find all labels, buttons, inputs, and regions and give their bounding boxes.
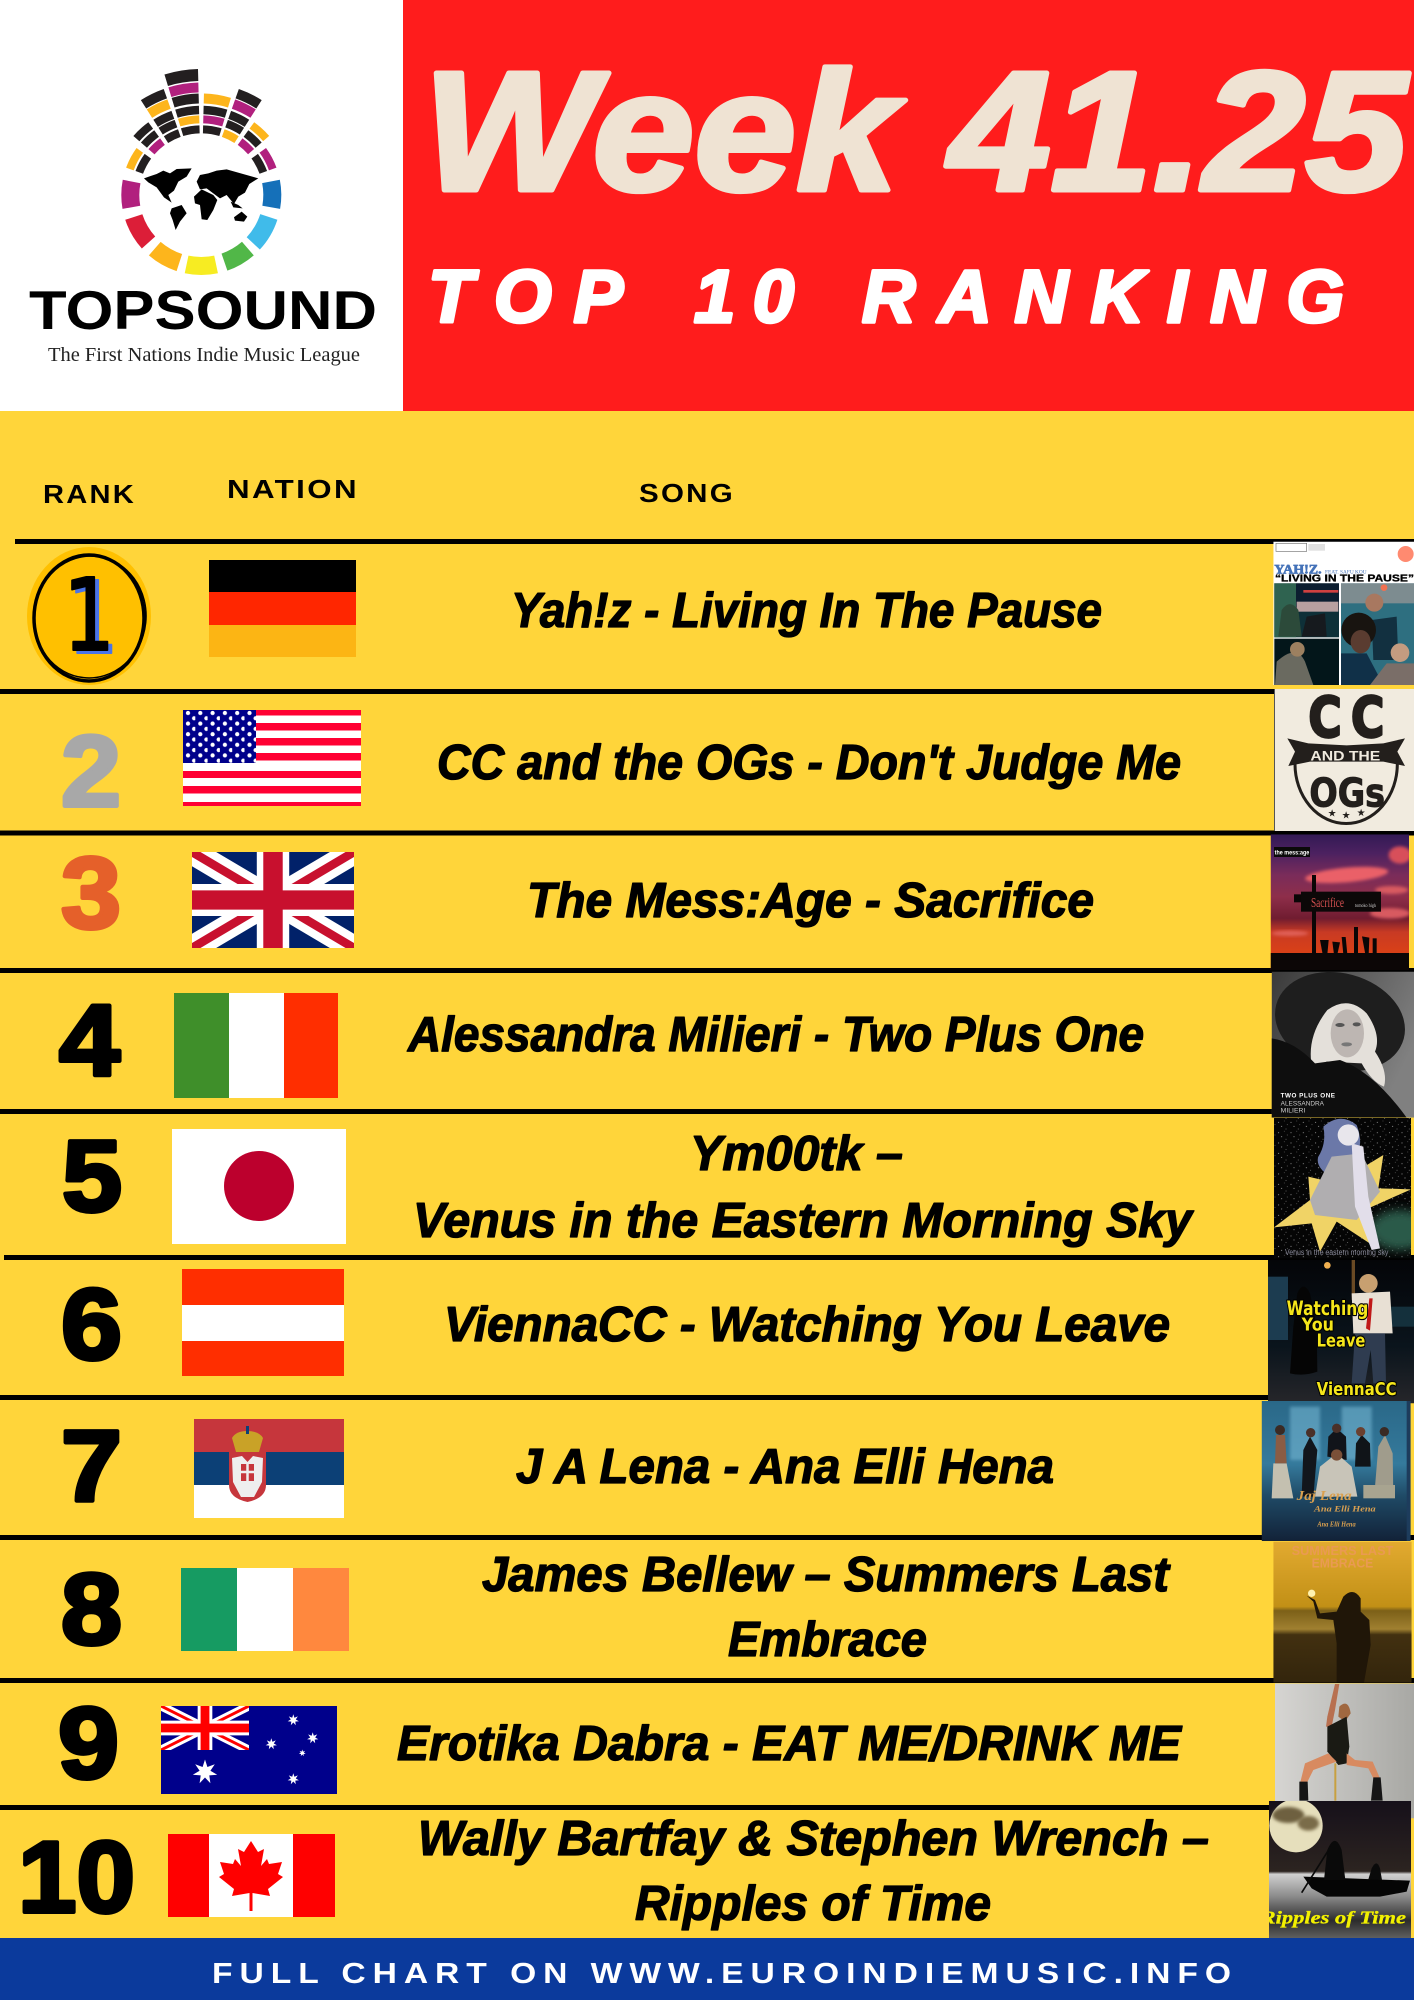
rank 1 badge: 1 — [67, 560, 119, 677]
song 5: Venus in the Eastern Morning Sky — [413, 1194, 1195, 1248]
column headings — [43, 474, 735, 509]
column headings: RANK — [43, 479, 136, 509]
cover 6: ViennaCC: Leave — [1317, 1331, 1365, 1352]
cover 1: Yah!z: “LIVING IN THE PAUSE” — [1275, 574, 1414, 585]
rank 4: 4 — [59, 985, 120, 1097]
panel: header — [403, 0, 1414, 411]
cover 7: J A Lena: Ana Elli Hena — [1316, 1520, 1356, 1529]
cover 2: CC and the OGs: OGs — [1309, 771, 1385, 817]
cover 4: Alessandra Milieri: ALESSANDRA — [1281, 1101, 1325, 1108]
flag: Canada — [168, 1834, 335, 1917]
title: week: Week 41.25 — [423, 37, 1410, 227]
cover 7: J A Lena — [1262, 1401, 1411, 1541]
rank 7: 7 — [61, 1411, 122, 1523]
icon: world map — [144, 168, 258, 230]
cover 8: James Bellew — [1273, 1542, 1412, 1682]
flag: USA — [183, 710, 361, 806]
rank 10: 10 — [18, 1822, 135, 1934]
song 7: J A Lena - Ana Elli Hena — [516, 1440, 1054, 1494]
subtitle: top 10 ranking — [428, 255, 1344, 338]
cover 3: The Mess:Age: the mess:age — [1275, 849, 1310, 856]
logo wordmark: TOPSOUND — [29, 279, 377, 341]
song 10: Ripples of Time — [635, 1877, 991, 1931]
subtitle: top 10 ranking: TOP — [428, 255, 624, 338]
rank 2: 2 — [61, 716, 121, 828]
flag: Serbia — [194, 1419, 344, 1518]
rank 5: 5 — [62, 1121, 122, 1233]
song 6: ViennaCC - Watching You Leave — [444, 1298, 1170, 1352]
flag: UK — [192, 852, 354, 948]
song 4: Alessandra Milieri - Two Plus One — [407, 1008, 1144, 1062]
cover 2: CC and the OGs: ★ — [1328, 809, 1337, 820]
cover 1: Yah!z — [1273, 542, 1414, 685]
footer — [0, 1938, 1414, 2000]
footer text: FULL CHART ON WWW.EUROINDIEMUSIC.INFO — [212, 1958, 1238, 1990]
cover 6: ViennaCC: You — [1301, 1315, 1334, 1336]
cover 7: J A Lena: Ana Elli Hena — [1313, 1504, 1376, 1514]
cover 1: Yah!z: FEAT. SAFU KOU — [1325, 570, 1367, 575]
cover 8: James Bellew: EMBRACE — [1312, 1556, 1373, 1570]
cover 3: The Mess:Age: tomoko high — [1355, 904, 1377, 909]
cover 5: Ym00tk — [1274, 1118, 1411, 1258]
song 5: Ym00tk – — [690, 1127, 903, 1181]
cover 7: J A Lena: Jaj Lena — [1296, 1489, 1352, 1504]
cover 6: ViennaCC: Watching — [1287, 1297, 1368, 1320]
song 8: Embrace — [728, 1613, 927, 1667]
song 8 — [482, 1548, 1171, 1667]
logo tagline: The First Nations Indie Music League — [48, 344, 360, 366]
song 3: The Mess:Age - Sacrifice — [527, 874, 1094, 928]
cover 2: CC and the OGs: C — [1351, 686, 1384, 750]
cover 8: James Bellew: SUMMERS LAST — [1292, 1544, 1394, 1558]
rank 8: 8 — [61, 1554, 122, 1666]
cover 6: ViennaCC — [1268, 1260, 1414, 1404]
cover 2: CC and the OGs: ★ — [1342, 811, 1351, 822]
column headings: SONG — [639, 478, 735, 508]
flag: Ireland — [181, 1568, 349, 1651]
rank 1 badge — [27, 547, 152, 685]
cover 9: Erotika Dabra — [1275, 1683, 1414, 1818]
rank 1 badge: 1 — [63, 557, 115, 674]
subtitle: top 10 ranking: RANKING — [862, 255, 1344, 338]
cover 3: The Mess:Age: Sacrifice — [1311, 895, 1344, 910]
flag: Japan — [172, 1129, 346, 1244]
panel: logo — [0, 0, 403, 411]
cover 4: Alessandra Milieri: TWO PLUS ONE — [1281, 1092, 1335, 1099]
flag: Australia — [161, 1706, 337, 1794]
rank 9: 9 — [58, 1688, 119, 1800]
cover 2: CC and the OGs: AND THE — [1310, 748, 1380, 764]
song 1: Yah!z - Living In The Pause — [511, 584, 1102, 638]
flag: Germany — [209, 560, 356, 657]
cover 3: The Mess:Age — [1270, 834, 1409, 970]
cover 10: Wally Bartfay — [1259, 1801, 1411, 1938]
rank 6: 6 — [61, 1269, 122, 1381]
flag: Italy — [174, 993, 338, 1098]
cover 4: Alessandra Milieri — [1272, 972, 1414, 1118]
cover 10: Wally Bartfay: Ripples of Time — [1259, 1907, 1406, 1927]
song 8: James Bellew – Summers Last — [482, 1548, 1171, 1602]
cover 6: ViennaCC: ViennaCC — [1317, 1380, 1397, 1400]
cover 2: CC and the OGs: C — [1308, 686, 1342, 750]
cover 2: CC and the OGs: ★ — [1357, 808, 1366, 819]
cover 1: Yah!z: YAH!Z. — [1274, 562, 1322, 576]
song 5 — [413, 1127, 1195, 1248]
logo emblem — [51, 45, 351, 345]
cover 2: CC and the OGs — [1274, 686, 1414, 831]
song 10 — [418, 1812, 1209, 1931]
cover 4: Alessandra Milieri: MILIERI — [1281, 1107, 1306, 1114]
column headings: NATION — [227, 474, 359, 504]
subtitle: top 10 ranking: 10 — [694, 255, 794, 338]
song 10: Wally Bartfay & Stephen Wrench – — [418, 1812, 1209, 1866]
flag: Austria — [182, 1269, 344, 1376]
song 2: CC and the OGs - Don't Judge Me — [437, 736, 1181, 790]
song 9: Erotika Dabra - EAT ME/DRINK ME — [397, 1717, 1182, 1771]
cover 5: Ym00tk: Venus in the eastern morning sky — [1285, 1248, 1388, 1257]
rank 3: 3 — [61, 838, 121, 950]
